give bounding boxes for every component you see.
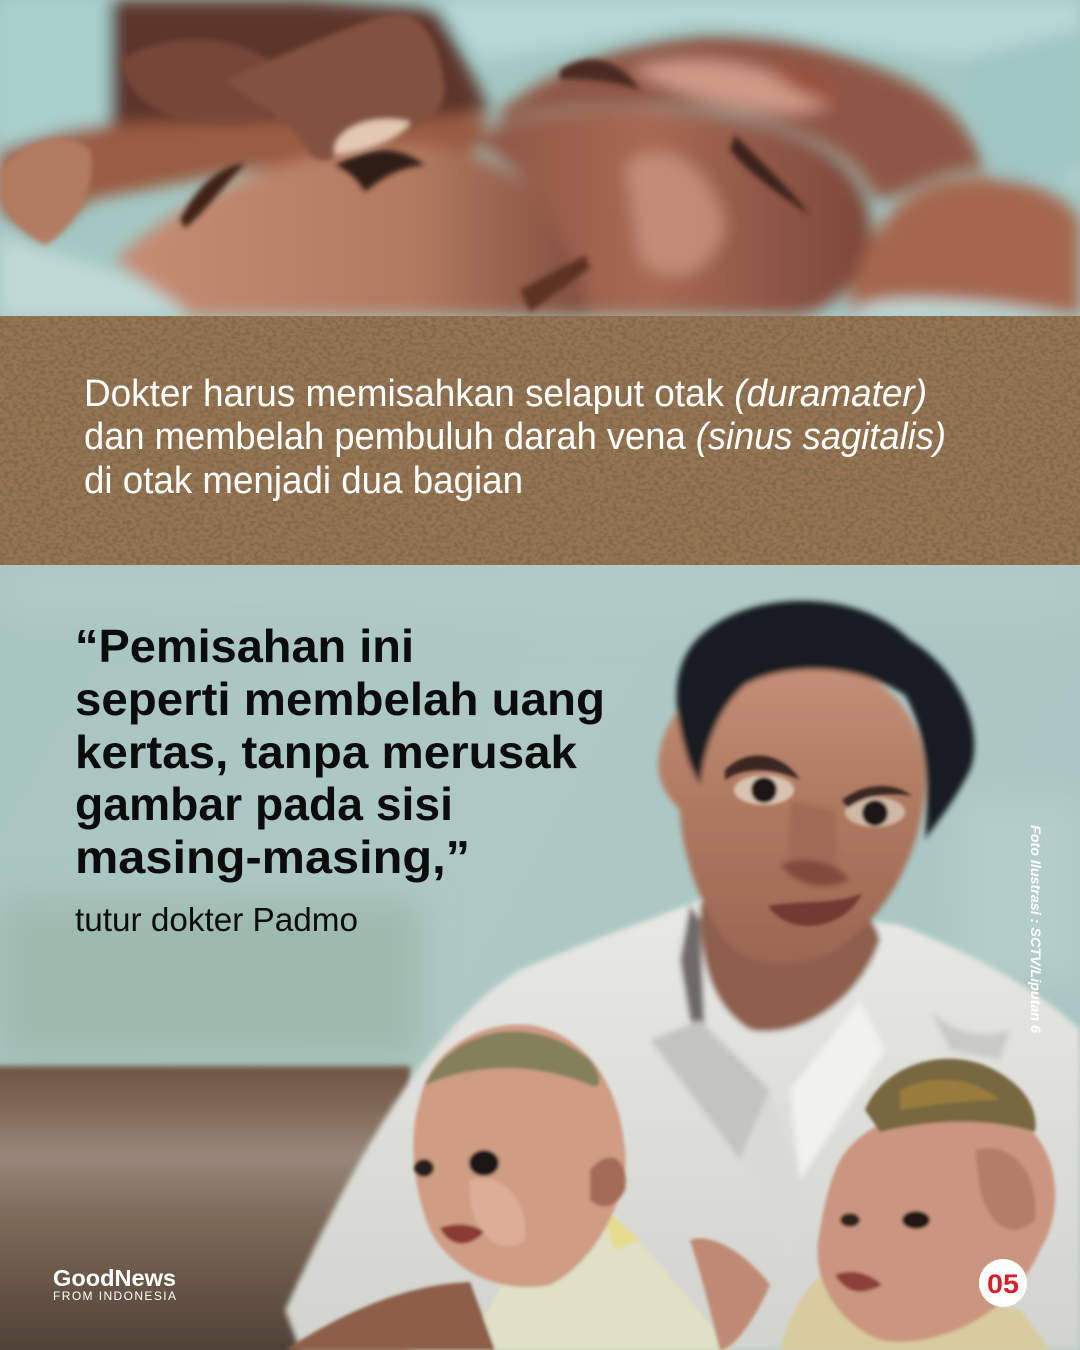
logo: GoodNews from Indonesia (53, 1265, 176, 1303)
quote heading: seperti membelah uang (75, 673, 605, 725)
photo: surgeon's hand over conjoined twins (0, 0, 1080, 316)
text block: explanation of the procedure (84, 373, 946, 502)
baby on the left (285, 1024, 730, 1350)
panel: textured brown band (0, 316, 1080, 565)
quote heading: kertas, tanpa merusak (75, 726, 577, 778)
page number badge (979, 1259, 1027, 1307)
quote heading: “Pemisahan ini (75, 620, 414, 672)
quote attribution: tutur dokter Padmo (75, 901, 358, 938)
photo: doctor Padmo holding the twins (0, 565, 1080, 1350)
baby on the right (690, 1059, 1055, 1350)
text block: explanation of the procedure: dan membelah pembuluh darah vena (sinus sagitalis) (84, 416, 946, 458)
text block: explanation of the procedure: di otak menjadi dua bagian (84, 460, 523, 502)
logo: GoodNews from Indonesia: GoodNews (53, 1265, 176, 1291)
quote heading: masing-masing,” (75, 831, 470, 883)
text block: explanation of the procedure: Dokter harus memisahkan selaput otak (duramater) (84, 373, 927, 415)
quote heading: gambar pada sisi (75, 778, 453, 830)
page number badge: 05 (987, 1269, 1019, 1299)
logo: GoodNews from Indonesia: FROM INDONESIA (53, 1289, 176, 1303)
quote heading (75, 620, 605, 883)
photo credit: Foto Ilustrasi : SCTV/Liputan 6 (1028, 825, 1044, 1033)
